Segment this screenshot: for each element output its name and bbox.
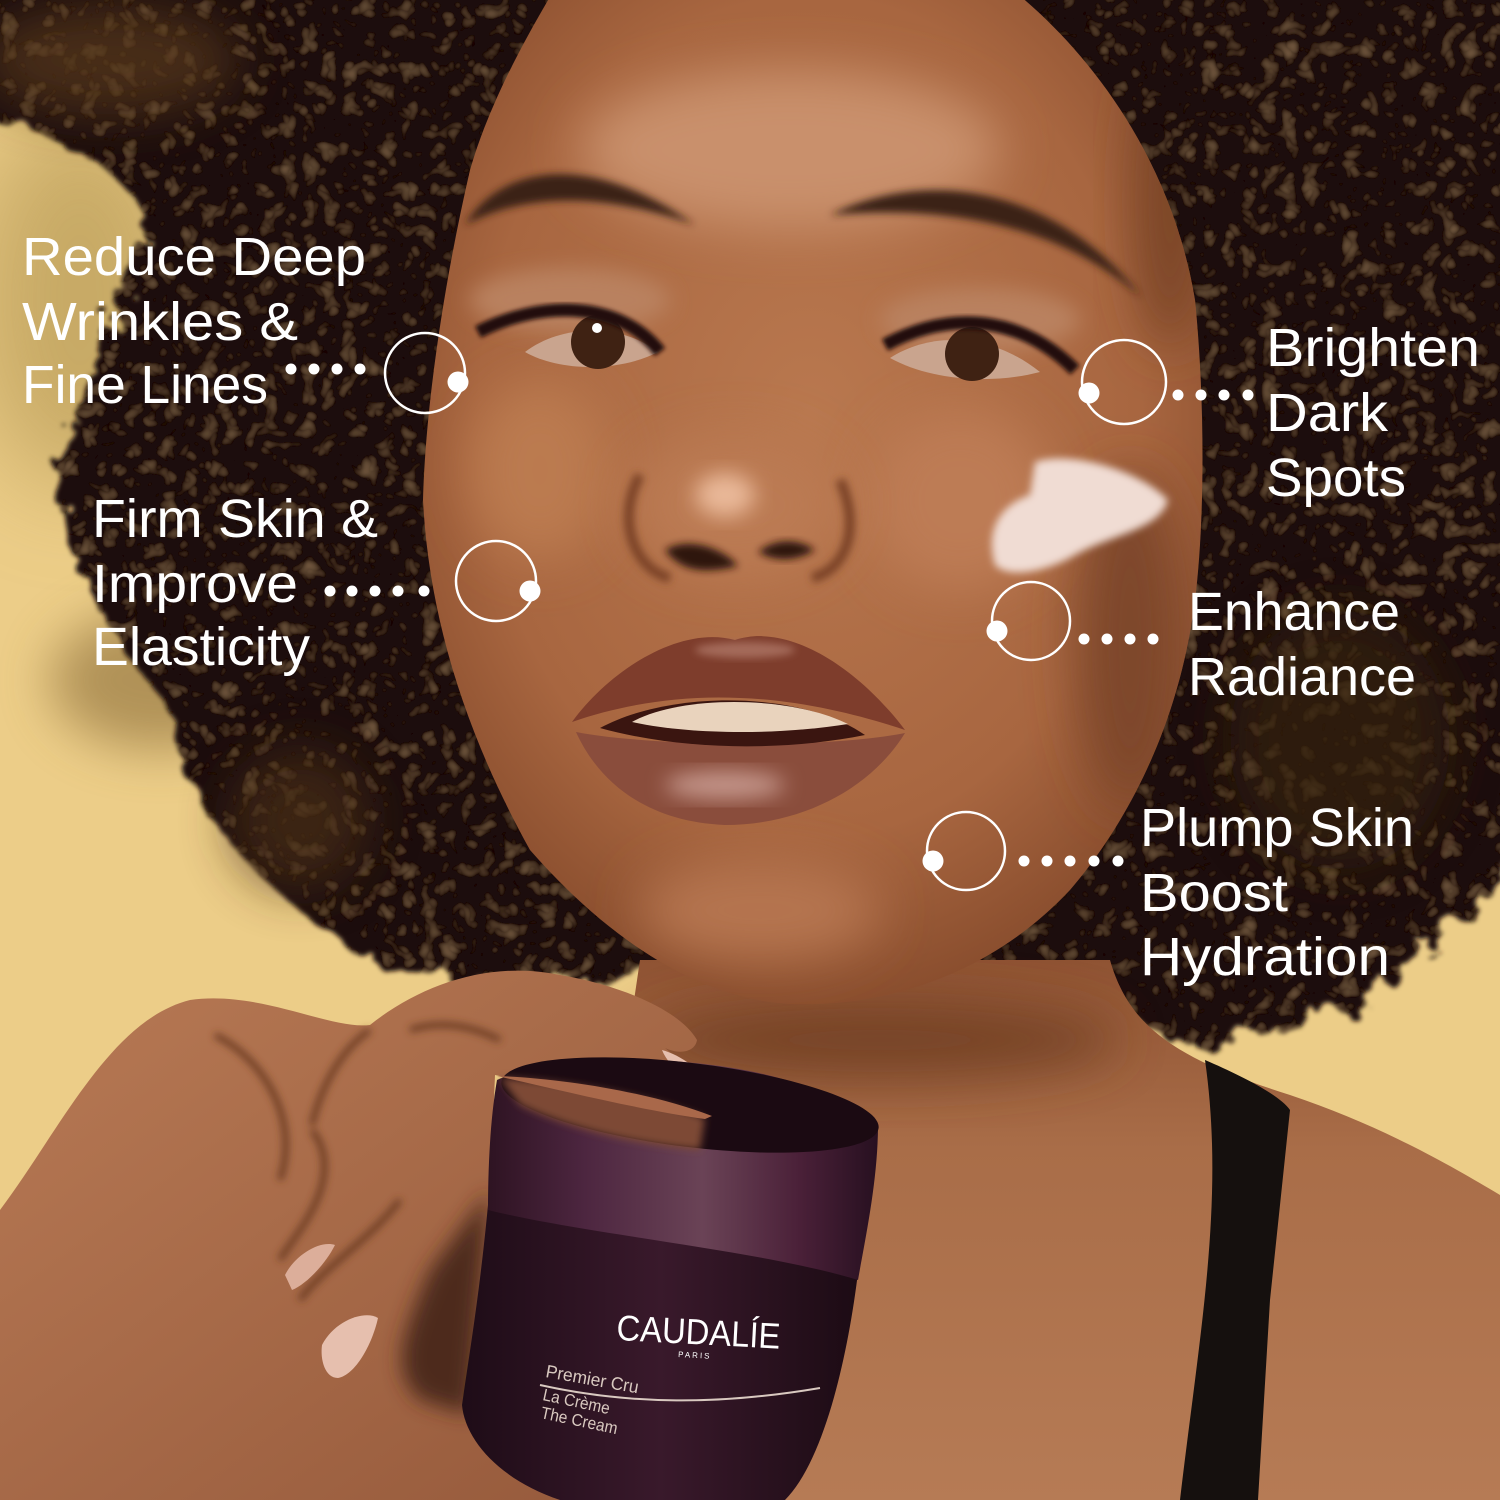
nose [629, 435, 850, 578]
jar: Premier Cru [544, 1361, 640, 1397]
jar: PARIS [678, 1350, 712, 1361]
callout: plump skin: Plump Skin [1140, 798, 1414, 858]
shadow between hand and jar [402, 1190, 490, 1415]
callout: brighten dark spots: Spots [1266, 448, 1406, 508]
brand text: CAUDALÍE [616, 1307, 782, 1357]
finger reflection on lid [500, 1078, 705, 1150]
hair [0, 0, 1500, 1041]
callout: plump skin: Hydration [1140, 927, 1390, 987]
callout: firm skin: Improve [92, 554, 298, 614]
jar: The Cream [539, 1403, 619, 1438]
callout: brighten dark spots: Dark [1266, 383, 1389, 443]
right eye [880, 288, 1080, 381]
fingernail lower [322, 1315, 378, 1378]
callout: brighten dark spots: Brighten [1266, 318, 1480, 378]
callout: reduce deep wrinkles: Wrinkles & [22, 292, 298, 352]
callout: firm skin: Firm Skin & [92, 489, 378, 549]
callout: enhance radiance: Radiance [1188, 647, 1416, 707]
hand [0, 971, 715, 1500]
left eyebrow [465, 174, 695, 225]
callout: reduce deep wrinkles: Fine Lines [22, 355, 268, 415]
lips [572, 636, 905, 825]
background shadow near hair [0, 110, 270, 750]
callout: plump skin [922, 798, 1414, 987]
callout: firm skin: Elasticity [92, 617, 310, 677]
jar body [462, 1205, 860, 1500]
jar [462, 1040, 884, 1500]
callout: reduce deep wrinkles [22, 227, 468, 415]
finger creases [215, 1025, 500, 1300]
finger over lid [497, 1076, 712, 1119]
fingernail upper [285, 1244, 335, 1290]
jar lid [488, 1060, 878, 1280]
fingernail top [662, 1050, 715, 1098]
jar: La Crème [541, 1385, 612, 1418]
callout: reduce deep wrinkles: Reduce Deep [22, 227, 366, 287]
shoulder and neck [560, 960, 1500, 1500]
black top strap [1180, 1060, 1290, 1500]
callout: firm skin [92, 489, 540, 677]
callout: enhance radiance: Enhance [1188, 582, 1400, 642]
lid top [496, 1040, 884, 1170]
left eye [470, 268, 670, 369]
right eyebrow [830, 190, 1142, 298]
face [400, 0, 1220, 1020]
callout: enhance radiance [986, 582, 1416, 707]
callout: plump skin: Boost [1140, 863, 1288, 923]
cream swatch [992, 458, 1168, 572]
callout: brighten dark spots [1078, 318, 1480, 508]
